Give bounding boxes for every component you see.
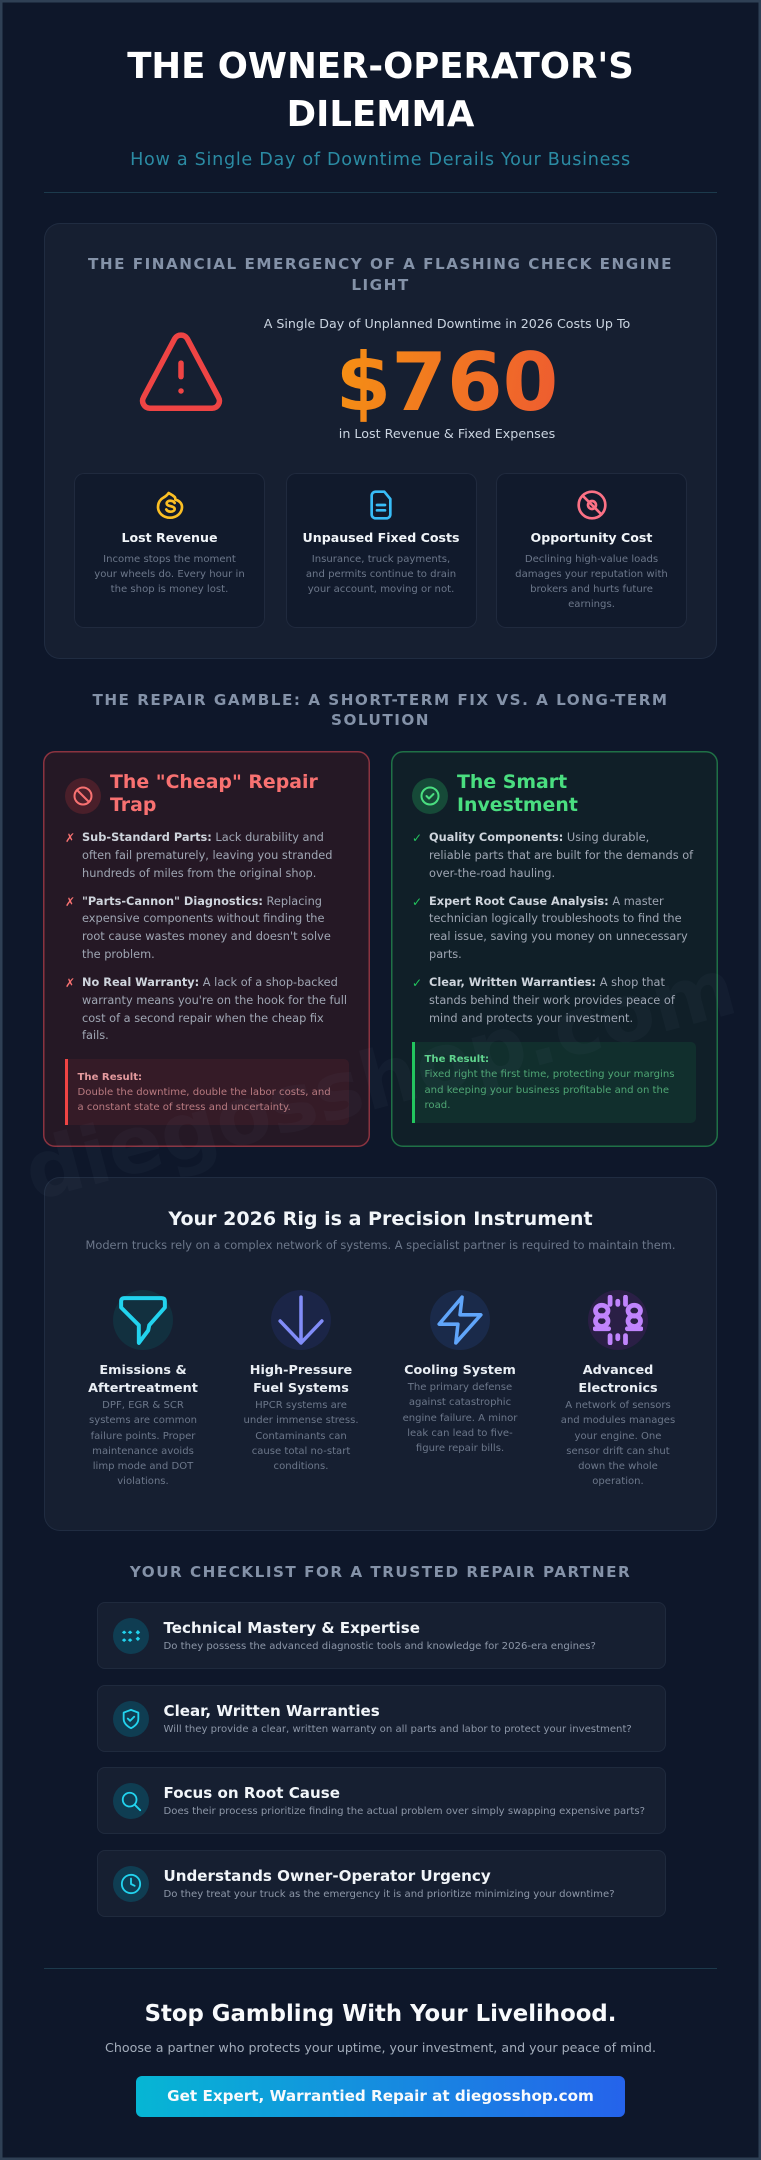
list item: components: Quality Components: Using durable, (429, 830, 649, 844)
big stat: $760: $760 (336, 336, 558, 429)
list item: components: reliable parts that are built for the demands of (429, 848, 693, 862)
title (127, 46, 634, 135)
system text: A network of sensors (565, 1400, 671, 1411)
system text: maintenance avoids (92, 1446, 194, 1457)
item title: Focus on Root Cause (164, 1784, 340, 1802)
callout: good result (412, 1042, 696, 1123)
card text: your account, moving or not. (308, 584, 454, 595)
system text: leak can lead to five- (407, 1428, 513, 1439)
card: lost revenue (74, 473, 265, 628)
list item: components (412, 830, 694, 880)
list item: analysis: Expert Root Cause Analysis: A master (429, 894, 664, 908)
system text (89, 1400, 197, 1487)
system text: limp mode and DOT (93, 1461, 193, 1472)
system text: against catastrophic (409, 1397, 511, 1408)
system text: violations. (117, 1476, 169, 1487)
system text: HPCR systems are (255, 1400, 347, 1411)
subtitle: How a Single Day of Downtime Derails Your Business (130, 150, 631, 170)
list item: warranty: ✗ (65, 976, 75, 990)
icon: crossed target (577, 490, 607, 520)
stat intro text: A Single Day of Unplanned Downtime in 2026 Costs Up To (264, 316, 630, 331)
section heading: checklist: YOUR CHECKLIST FOR A TRUSTED REPAIR PARTNER (130, 1562, 631, 1580)
card text: brokers and hurts future (530, 584, 653, 595)
item text: Does their process prioritize finding the actual problem over simply swapping expensive parts? (164, 1806, 645, 1817)
intro text: Modern trucks rely on a complex network of systems. A specialist partner is required to maintain them. (86, 1238, 675, 1252)
panel: financial emergency (44, 223, 717, 659)
callout: bad result: The Result: (78, 1072, 142, 1082)
list item: warranties: stands behind their work provides peace of (429, 993, 675, 1007)
callout: bad result: a constant state of stress and uncertainty. (78, 1102, 291, 1113)
icon: circuit modules (588, 1290, 648, 1350)
system text: systems are common (89, 1415, 197, 1426)
callout: bad result (65, 1059, 349, 1125)
icon: ban (65, 778, 101, 814)
system text: and modules manages (561, 1415, 675, 1426)
heading: cheap repair trap: Trap (110, 794, 156, 816)
system text: cause total no-start (252, 1446, 350, 1457)
system text: The primary defense (408, 1382, 512, 1393)
icon: document (370, 490, 392, 520)
card text: earnings. (568, 599, 615, 610)
call to action button (136, 2076, 625, 2117)
list item: warranties: Clear, Written Warranties: A shop that (429, 975, 665, 989)
card text: your wheels do. Every hour in (94, 569, 245, 580)
icon: magnifier (112, 1783, 148, 1819)
item title: Understands Owner-Operator Urgency (164, 1866, 491, 1884)
system title (250, 1363, 352, 1396)
item title: Clear, Written Warranties (164, 1702, 380, 1720)
list item: warranty: cost of a second repair when the cheap fix (82, 1011, 324, 1025)
list item: analysis: parts. (429, 947, 462, 961)
system text: conditions. (274, 1461, 328, 1472)
system text (403, 1382, 518, 1454)
list item: diagnostics: "Parts-Cannon" Diagnostics: Replacing (82, 894, 322, 908)
heading: cheap repair trap (110, 771, 318, 816)
list item: analysis: technician logically troubleshoots to find the (429, 911, 682, 925)
system text: under immense stress. (243, 1415, 359, 1426)
card title: Unpaused Fixed Costs (302, 530, 460, 545)
heading: smart investment: Investment (457, 794, 578, 816)
system text: DPF, EGR & SCR (102, 1400, 184, 1411)
heading: cheap repair trap: The "Cheap" Repair (110, 771, 318, 793)
item text: Do they possess the advanced diagnostic tools and knowledge for 2026-era engines? (164, 1641, 596, 1652)
list item: warranty: warranty means you're on the hook for the full (82, 993, 347, 1007)
checklist item: urgency (96, 1850, 666, 1916)
system title: Electronics (578, 1381, 658, 1396)
checklist item: warranties (96, 1684, 666, 1752)
system: fuel (243, 1290, 359, 1472)
checklist item: root cause (96, 1767, 666, 1834)
panel: smart investment (391, 751, 718, 1147)
callout: good result: Fixed right the first time, protecting your margins (424, 1069, 674, 1080)
section heading: repair gamble: THE REPAIR GAMBLE: A SHORT-TERM FIX VS. A LONG-TERM (92, 690, 669, 708)
list item: warranty: No Real Warranty: A lack of a shop-backed (82, 975, 338, 989)
checklist item: technical mastery (96, 1602, 666, 1669)
list item: warranties (412, 975, 676, 1025)
list item: parts: Sub-Standard Parts: Lack durability and (82, 830, 324, 844)
system: emissions (88, 1290, 198, 1487)
system text: operation. (592, 1476, 644, 1487)
system title (578, 1363, 658, 1396)
heading: smart investment: The Smart (457, 771, 567, 793)
list item: components: ✓ (412, 831, 422, 845)
card: unpaused fixed costs (286, 473, 476, 628)
system title: Fuel Systems (253, 1381, 349, 1396)
system text: engine failure. A minor (403, 1412, 517, 1424)
system: electronics (561, 1290, 675, 1487)
section heading: repair gamble (92, 690, 669, 729)
list item: analysis: ✓ (412, 894, 422, 908)
list item: warranties: mind and protects your investment. (429, 1011, 633, 1025)
stat caption: in Lost Revenue & Fixed Expenses (339, 426, 555, 441)
card text: Income stops the moment (103, 554, 236, 564)
list item: diagnostics: root cause wastes money and doesn't solve (82, 929, 331, 943)
system title (88, 1363, 198, 1396)
section heading: financial emergency: LIGHT (351, 276, 410, 294)
card title: Opportunity Cost (531, 530, 652, 545)
list item: parts: hundreds of miles from the original shop. (82, 866, 316, 880)
heading: precision instrument: Your 2026 Rig is a Precision Instrument (168, 1208, 593, 1230)
system title: High-Pressure (250, 1363, 352, 1378)
icon: coin flame (156, 492, 184, 519)
title: THE OWNER-OPERATOR'S (127, 46, 634, 87)
card text: damages your reputation with (515, 569, 668, 580)
card text: Declining high-value loads (525, 554, 658, 564)
list item: analysis: real issue, saving you money on unnecessary (429, 929, 688, 943)
system text: down the whole (578, 1461, 658, 1472)
system title: Cooling System (404, 1363, 516, 1378)
list item: diagnostics (65, 894, 331, 961)
section heading: financial emergency: THE FINANCIAL EMERGENCY OF A FLASHING CHECK ENGINE (88, 255, 673, 273)
icon: check circle (412, 778, 448, 814)
item text: Will they provide a clear, written warranty on all parts and labor to protect your investment? (164, 1724, 632, 1734)
list item: parts (65, 830, 332, 880)
list item: diagnostics: the problem. (82, 947, 155, 961)
section heading: financial emergency (88, 255, 673, 294)
title: DILEMMA (287, 94, 474, 135)
callout: good result: and keeping your business profitable and on the (424, 1085, 669, 1096)
callout: bad result: Double the downtime, double the labor costs, and (78, 1087, 331, 1098)
list item: warranty (65, 975, 347, 1042)
icon: shield check (112, 1700, 148, 1736)
big stat: $760 (247, 335, 647, 431)
card: opportunity cost (496, 473, 687, 628)
system text (243, 1400, 359, 1472)
item title: Technical Mastery & Expertise (164, 1619, 420, 1637)
system title: Advanced (583, 1363, 653, 1378)
heading: smart investment (457, 771, 578, 816)
card text (306, 554, 456, 595)
list item: components: over-the-road hauling. (429, 866, 555, 880)
list item: parts: ✗ (65, 831, 75, 845)
panel: cheap repair trap (43, 751, 370, 1147)
icon: clock (112, 1866, 148, 1902)
system text: figure repair bills. (416, 1443, 504, 1454)
icon: warning triangle (140, 332, 222, 411)
list item: analysis (412, 894, 688, 961)
card text: Insurance, truck payments, (312, 554, 450, 564)
system title: Emissions & (99, 1363, 187, 1378)
watermark: diegosshop.com (14, 940, 745, 1219)
list item: warranties: ✓ (412, 976, 422, 990)
system title: Aftertreatment (88, 1381, 198, 1396)
card text (515, 554, 668, 610)
card text: and permits continue to drain (306, 569, 456, 580)
card text: the shop is money lost. (111, 584, 228, 595)
system: cooling (403, 1290, 518, 1454)
list item: diagnostics: expensive components without finding the (82, 911, 324, 925)
callout: good result: road. (424, 1100, 450, 1111)
card title: Lost Revenue (121, 530, 218, 545)
system text: failure points. Proper (91, 1430, 195, 1442)
item text: Do they treat your truck as the emergency it is and prioritize minimizing your downtime? (164, 1888, 615, 1900)
icon: lightning bolt (430, 1290, 490, 1350)
system text: your engine. One (575, 1430, 661, 1442)
callout: good result: The Result: (424, 1054, 489, 1065)
icon: funnel (113, 1290, 173, 1350)
system text (561, 1400, 675, 1487)
icon: sliders (112, 1618, 148, 1654)
icon: down arrow (271, 1290, 331, 1350)
system text: Contaminants can (255, 1430, 347, 1442)
section heading: repair gamble: SOLUTION (331, 711, 430, 729)
panel: precision instrument (44, 1177, 717, 1531)
card text (94, 554, 245, 595)
call to action text: Choose a partner who protects your uptime, your investment, and your peace of mind. (105, 2040, 656, 2055)
call to action heading: Stop Gambling With Your Livelihood. (145, 2001, 616, 2027)
list item: warranty: fails. (82, 1028, 109, 1042)
list item: parts: often fail prematurely, leaving you stranded (82, 848, 332, 862)
call to action button: Get Expert, Warrantied Repair at diegosshop.com (167, 2087, 594, 2105)
list item: diagnostics: ✗ (65, 894, 75, 908)
system text: sensor drift can shut (566, 1446, 670, 1457)
